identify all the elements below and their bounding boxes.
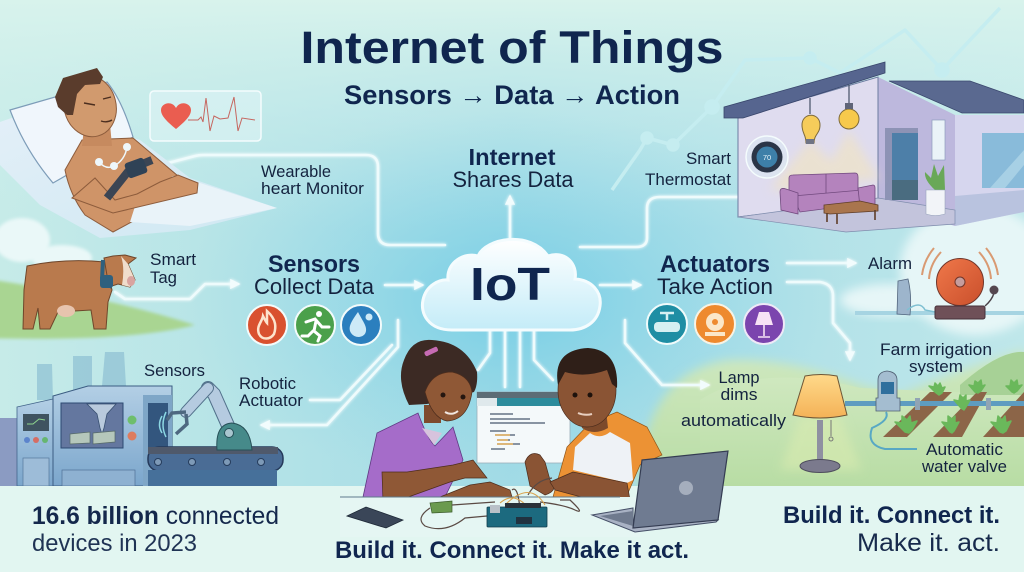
title: Internet of Things bbox=[300, 22, 724, 73]
label: lamp dims automatically: Lamp bbox=[718, 369, 760, 387]
label: farm irrigation system: system bbox=[909, 358, 963, 376]
thermostat bbox=[746, 136, 788, 178]
heading: actuators bbox=[657, 251, 773, 299]
phone bbox=[347, 507, 403, 528]
icon: lamp actuator bbox=[744, 304, 784, 344]
label: alarm: Alarm bbox=[868, 255, 912, 273]
head bbox=[57, 69, 123, 143]
sofa bbox=[780, 173, 875, 214]
label: smart tag: Smart bbox=[150, 251, 196, 269]
panel: students building a device bbox=[340, 340, 728, 537]
light glow bbox=[770, 130, 880, 190]
label: lamp dims automatically bbox=[681, 369, 787, 430]
label: smart thermostat bbox=[645, 150, 731, 189]
side and right wall bbox=[878, 77, 955, 226]
electrodes bbox=[99, 147, 127, 167]
slogan right: Build it. Connect it. bbox=[783, 502, 1000, 529]
sensor module bbox=[430, 501, 452, 513]
neck bbox=[82, 124, 112, 146]
interior wall bbox=[738, 77, 878, 217]
boy arms bbox=[525, 454, 554, 495]
label: automatic water valve: water valve bbox=[921, 458, 1007, 476]
icon: water sensor bbox=[341, 305, 381, 345]
label: internet shares data: Internet bbox=[468, 144, 556, 170]
bulbs bbox=[810, 85, 849, 114]
main machine bbox=[53, 386, 172, 486]
window slit bbox=[932, 120, 945, 160]
far left building bbox=[0, 418, 18, 486]
pillow bbox=[10, 82, 133, 183]
purple shirt bbox=[363, 413, 463, 497]
pipe bbox=[845, 401, 1024, 406]
hair bbox=[55, 68, 103, 115]
icon: table lamp bbox=[780, 374, 862, 472]
stat: connected devices bbox=[32, 502, 279, 557]
label: robotic actuator: Robotic bbox=[239, 375, 296, 393]
slogan centre: Build it. Connect it. Make it act. bbox=[335, 537, 689, 564]
slogan right bbox=[783, 502, 1000, 557]
panel: heart rate display bbox=[150, 91, 261, 141]
heading: sensors: Collect Data bbox=[254, 274, 374, 299]
bed sheet over legs bbox=[130, 176, 277, 226]
machine window bbox=[61, 403, 123, 448]
orange shirt bbox=[553, 412, 662, 500]
label: robotic actuator: Actuator bbox=[239, 392, 304, 410]
face bbox=[425, 372, 472, 421]
soil rows bbox=[883, 392, 1024, 437]
bed and sheet bbox=[0, 108, 277, 238]
left roof bbox=[724, 62, 885, 118]
pasture and cloud bbox=[0, 278, 195, 339]
panel: cow with smart tag bbox=[0, 218, 195, 339]
label: smart thermostat: Smart bbox=[686, 150, 731, 168]
panel: patient with wearable heart monitor bbox=[0, 68, 277, 238]
patient body bbox=[65, 138, 178, 232]
subtitle: Sensors → Data → Action bbox=[344, 80, 680, 110]
icon: alarm bell bbox=[855, 248, 1024, 319]
label: automatic water valve bbox=[921, 441, 1007, 476]
icon: alarm actuator bbox=[695, 304, 735, 344]
table bbox=[340, 497, 640, 537]
cow body bbox=[23, 261, 112, 329]
right roof bbox=[889, 81, 1024, 113]
label: wearable heart monitor: Wearable bbox=[261, 163, 331, 181]
IoT cloud: IoT bbox=[470, 258, 550, 310]
udder bbox=[57, 305, 75, 317]
water valve controller bbox=[876, 371, 900, 411]
monitor device bbox=[124, 157, 148, 179]
boy bbox=[525, 348, 662, 500]
label: farm irrigation system bbox=[880, 341, 992, 376]
IoT cloud bbox=[422, 239, 600, 330]
laptop bbox=[592, 451, 728, 532]
heading: actuators: Actuators bbox=[660, 251, 770, 278]
panel: irrigation field bbox=[845, 352, 1024, 449]
hose bbox=[871, 412, 917, 449]
seedlings bbox=[895, 380, 1022, 433]
stat: connected devices: devices in 2023 bbox=[32, 530, 197, 557]
door bbox=[885, 128, 918, 200]
coffee table bbox=[824, 201, 878, 214]
chest strap bbox=[107, 160, 152, 198]
label: factory sensors: Sensors bbox=[144, 362, 205, 380]
ponytail and hair bbox=[401, 340, 477, 405]
neck bbox=[424, 405, 441, 423]
wires bbox=[421, 478, 579, 529]
eyes and mouth bbox=[440, 392, 446, 398]
stat: connected devices: 16.6 billion connected bbox=[32, 502, 279, 530]
cow head bbox=[104, 255, 136, 287]
heading: sensors: Sensors bbox=[268, 251, 360, 278]
heartbeat trace bbox=[188, 97, 255, 131]
icon: motion sensor bbox=[295, 305, 335, 345]
background trend graph bbox=[612, 8, 1000, 190]
eyes and mouth bbox=[572, 392, 578, 398]
panel: smart home bbox=[724, 62, 1024, 232]
label: wearable heart monitor: heart Monitor bbox=[261, 180, 365, 198]
forearm bbox=[72, 175, 198, 213]
green hedge bbox=[960, 352, 1024, 395]
large window bbox=[982, 133, 1024, 188]
girl bbox=[363, 340, 512, 502]
floor bbox=[738, 198, 955, 232]
hair bbox=[557, 348, 617, 388]
label: internet shares data: Shares Data bbox=[452, 167, 574, 192]
conveyor belt bbox=[148, 447, 283, 471]
eyes and mouth bbox=[84, 97, 112, 122]
label: smart tag bbox=[150, 251, 196, 287]
label: smart thermostat: Thermostat bbox=[645, 171, 731, 189]
bottom strip bbox=[0, 486, 1024, 572]
label: robotic actuator bbox=[239, 375, 304, 410]
chimneys bbox=[37, 352, 126, 400]
panel: factory with robotic arm bbox=[0, 352, 283, 486]
girl arms bbox=[382, 460, 487, 502]
icon: heart bbox=[161, 103, 191, 129]
label: internet shares data bbox=[452, 144, 574, 192]
connector lines bbox=[115, 155, 855, 425]
icon: flame sensor bbox=[247, 305, 287, 345]
smart tag collar bbox=[102, 260, 112, 287]
slogan right: Make it. act. bbox=[857, 529, 1000, 557]
code screen bbox=[477, 392, 570, 463]
label: wearable heart monitor bbox=[261, 163, 365, 198]
potted plant bbox=[925, 164, 945, 190]
label: smart tag: Tag bbox=[150, 269, 177, 287]
robot arm bbox=[208, 388, 230, 430]
icon: valve actuator bbox=[647, 304, 687, 344]
label: automatic water valve: Automatic bbox=[926, 441, 1003, 459]
label: lamp dims automatically: dims bbox=[720, 386, 758, 404]
heading: actuators: Take Action bbox=[657, 274, 773, 299]
microcontroller board bbox=[487, 507, 547, 527]
panel: smart home: 70 bbox=[763, 153, 771, 162]
label: farm irrigation system: Farm irrigation bbox=[880, 341, 992, 359]
heading: sensors bbox=[254, 251, 374, 299]
face and neck bbox=[578, 410, 608, 432]
control cabinet bbox=[17, 399, 53, 486]
label: lamp dims automatically: automatically bbox=[681, 412, 787, 430]
